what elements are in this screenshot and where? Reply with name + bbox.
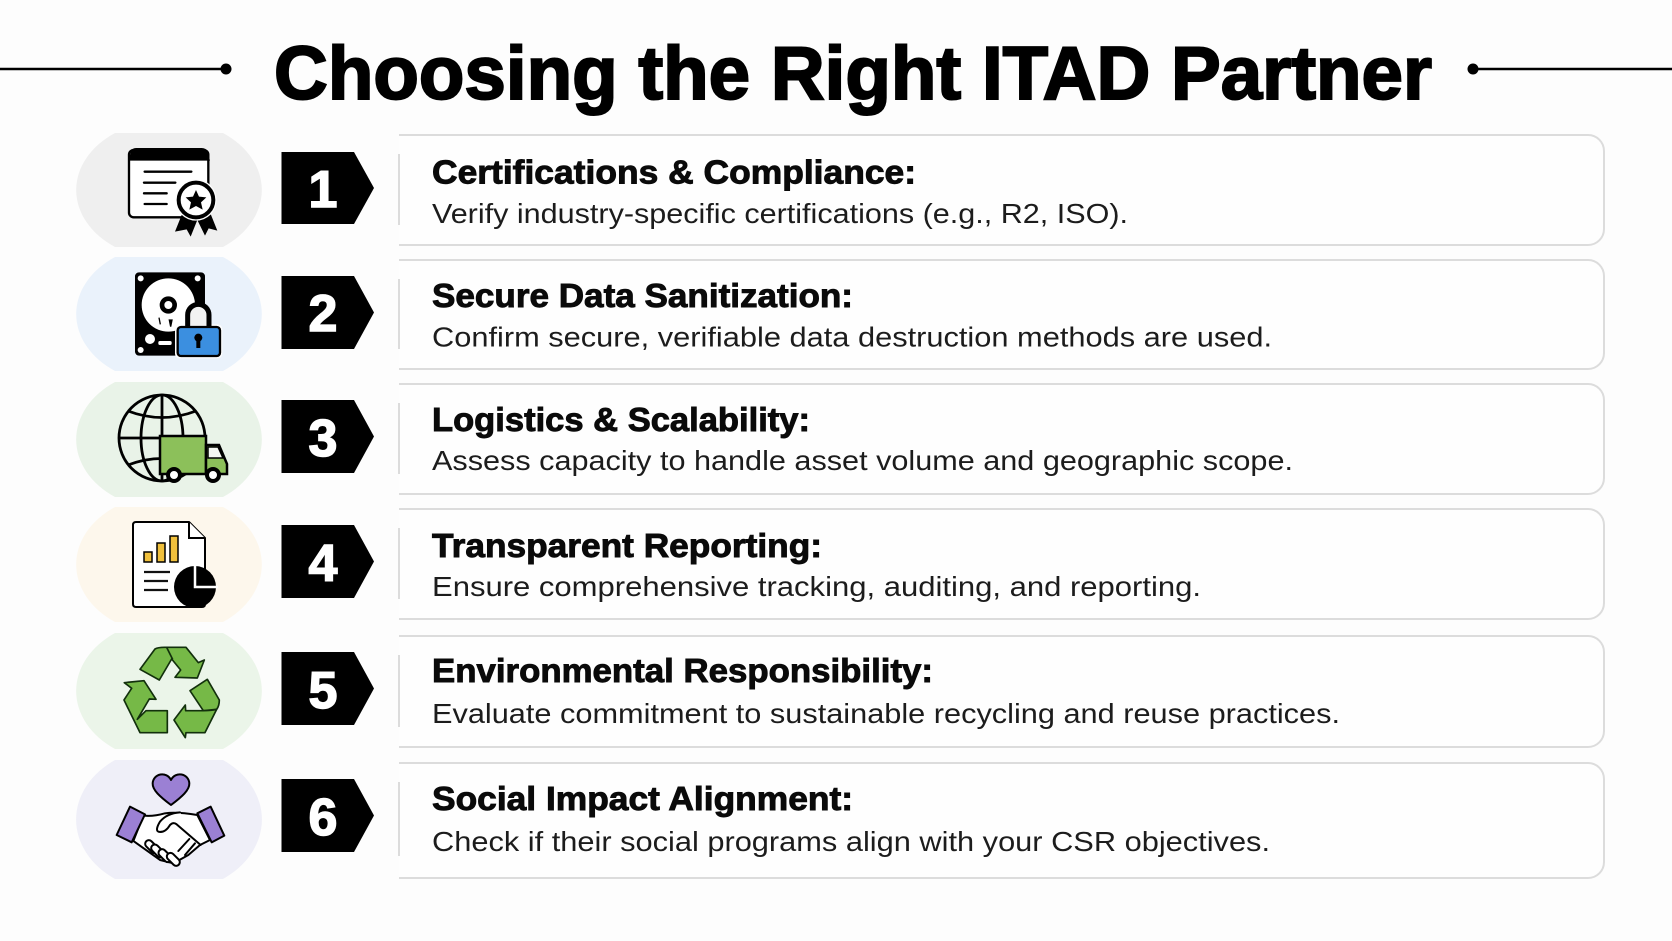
text card 6 <box>399 763 1604 878</box>
row 2: data sanitization <box>76 257 1604 371</box>
row 5: environmental <box>76 633 1604 749</box>
text card 5 <box>399 636 1604 747</box>
row 6: social impact <box>76 760 1604 879</box>
description 2: Confirm secure, verifiable data destruction methods are used. <box>432 322 1272 352</box>
number 5: 5 <box>309 662 337 720</box>
number badge 4 <box>282 525 374 598</box>
text card 4 <box>399 509 1604 619</box>
icon background 5 <box>76 633 262 749</box>
title: Choosing the Right ITAD Partner <box>274 31 1432 115</box>
heading 4: Transparent Reporting: <box>432 527 822 564</box>
description 3: Assess capacity to handle asset volume and geographic scope. <box>432 445 1293 476</box>
text card 1 <box>399 135 1604 245</box>
text card 2 <box>399 260 1604 369</box>
description 6: Check if their social programs align with your CSR objectives. <box>432 826 1270 857</box>
number 2: 2 <box>309 285 337 343</box>
number badge 1 <box>282 152 374 224</box>
row 4: reporting <box>76 507 1604 622</box>
number 3: 3 <box>309 410 337 468</box>
icon background 2 <box>76 257 262 371</box>
row 1: certifications <box>76 133 1604 247</box>
description 1: Verify industry-specific certifications (e.g., R2, ISO). <box>432 198 1128 229</box>
description 4: Ensure comprehensive tracking, auditing, and reporting. <box>432 571 1201 602</box>
text card 3 <box>399 384 1604 494</box>
number 4: 4 <box>309 535 338 593</box>
heading 2: Secure Data Sanitization: <box>432 277 853 314</box>
number badge 3 <box>282 400 374 473</box>
title rule: right <box>1468 64 1672 74</box>
number 1: 1 <box>309 161 337 219</box>
number badge 5 <box>282 652 374 725</box>
row 3: logistics <box>76 382 1604 497</box>
number 6: 6 <box>309 789 337 847</box>
heading 1: Certifications & Compliance: <box>432 154 916 190</box>
heading 3: Logistics & Scalability: <box>432 401 810 438</box>
icon: handshake and heart <box>117 774 224 867</box>
icon background 4 <box>76 507 262 622</box>
icon: report with charts <box>133 522 218 608</box>
heading 5: Environmental Responsibility: <box>432 652 933 689</box>
icon: recycle arrows <box>124 647 219 738</box>
description 5: Evaluate commitment to sustainable recycling and reuse practices. <box>432 698 1340 729</box>
number badge 6 <box>282 779 374 852</box>
icon background 3 <box>76 382 262 497</box>
icon background 6 <box>76 760 262 879</box>
icon: hard drive with lock <box>135 272 222 358</box>
title rule: left <box>0 64 232 74</box>
heading 6: Social Impact Alignment: <box>432 780 853 817</box>
icon: globe and truck <box>119 395 227 481</box>
number badge 2 <box>282 276 374 349</box>
icon: certificate <box>128 148 217 237</box>
icon background 1 <box>76 133 262 247</box>
